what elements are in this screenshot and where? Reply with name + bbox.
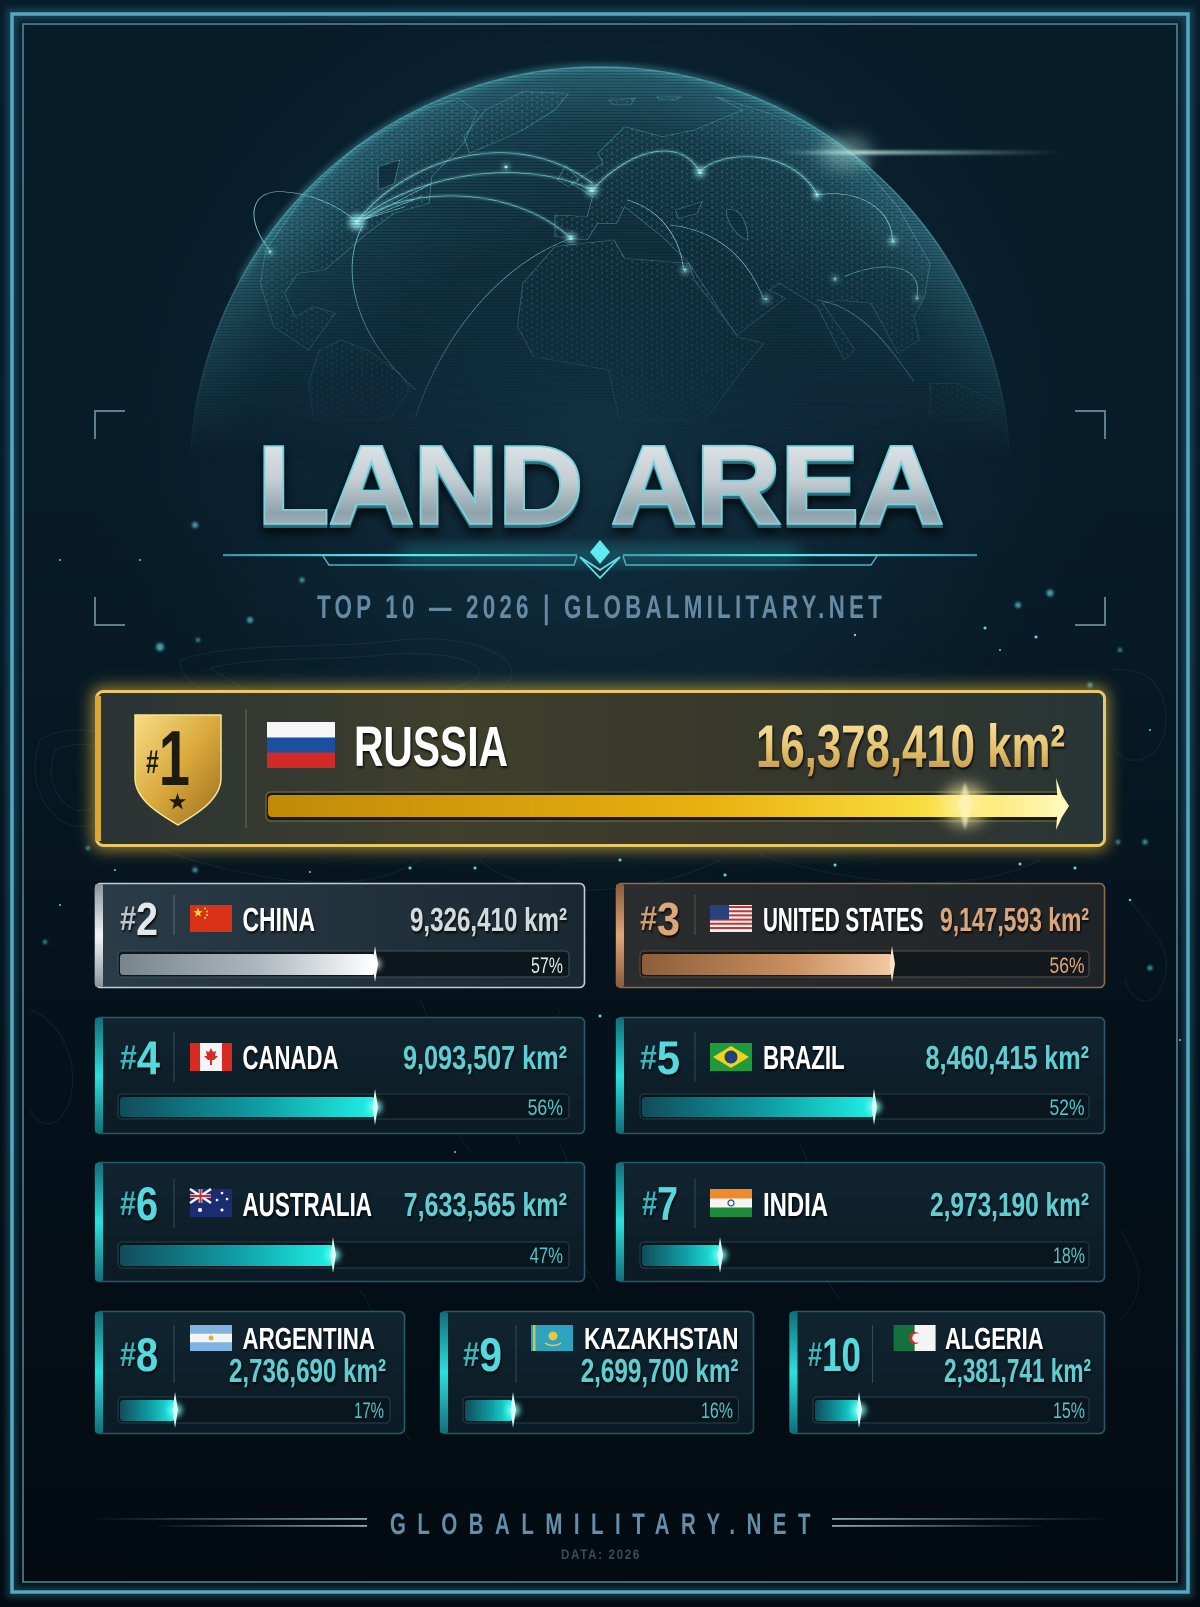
panel: rank 7 India: 2,973,190 km² <box>930 1186 1089 1223</box>
panel: rank 4 Canada: 4 <box>137 1031 160 1084</box>
flag: Algeria <box>894 1325 936 1351</box>
flag: India <box>710 1189 752 1217</box>
panel: rank 10 Algeria: # <box>808 1336 822 1374</box>
continents <box>260 92 1000 420</box>
title divider with diamond <box>223 540 977 578</box>
panel: rank 9 Kazakhstan <box>440 1312 754 1434</box>
panel: rank 8 Argentina: 17% <box>354 1398 384 1423</box>
panel: rank 6 Australia <box>95 1162 584 1282</box>
globe with network arcs <box>192 60 1008 440</box>
panel: rank 2 China <box>95 884 584 988</box>
icon: gold shield <box>135 714 221 825</box>
panel: rank 2 China: 9,326,410 km² <box>410 901 567 938</box>
panel: rank 5 Brazil: # <box>640 1039 657 1077</box>
panel: rank 4 Canada: CANADA <box>242 1039 338 1076</box>
panel: rank 1 Russia <box>92 687 1108 850</box>
panel: rank 2 China: 2 <box>136 893 158 945</box>
panel: rank 8 Argentina: 8 <box>136 1328 158 1381</box>
panel: rank 10 Algeria <box>790 1312 1104 1434</box>
panel: rank 8 Argentina <box>95 1312 404 1434</box>
panel: rank 9 Kazakhstan: KAZAKHSTAN <box>584 1321 738 1356</box>
panel: rank 7 India: 18% <box>1053 1243 1085 1268</box>
flag: Canada <box>190 1043 232 1071</box>
panel: rank 3 United States: 56% <box>1050 953 1084 978</box>
bar <box>266 778 1069 830</box>
flag: Brazil <box>710 1043 752 1071</box>
icon: gold shield: # <box>146 744 159 780</box>
particles <box>43 522 1181 1153</box>
value: 16,378,410 km² <box>756 713 1065 780</box>
panel: rank 4 Canada: 56% <box>528 1095 563 1120</box>
panel: rank 7 India: # <box>642 1185 657 1223</box>
footer brand: GLOBALMILITARY.NET <box>390 1508 822 1541</box>
panel: rank 10 Algeria: 2,381,741 km² <box>944 1352 1091 1389</box>
panel: rank 4 Canada: # <box>120 1039 137 1077</box>
panel: rank 6 Australia: 6 <box>136 1177 158 1230</box>
panel: rank 9 Kazakhstan: # <box>463 1336 479 1374</box>
panel: rank 2 China: # <box>120 900 136 938</box>
panel: rank 5 Brazil: BRAZIL <box>763 1039 845 1076</box>
panel: rank 8 Argentina: 2,736,690 km² <box>229 1352 386 1389</box>
panel: rank 3 United States: UNITED STATES <box>763 901 924 938</box>
panel: rank 3 United States: # <box>640 900 657 938</box>
flag: Australia <box>190 1189 232 1217</box>
panel: rank 10 Algeria: ALGERIA <box>945 1321 1044 1356</box>
corner brackets <box>95 411 1105 625</box>
title: LAND AREA <box>258 424 944 547</box>
panel: rank 4 Canada: 9,093,507 km² <box>403 1039 567 1076</box>
flag: United States <box>710 905 752 932</box>
footer data year: DATA: 2026 <box>561 1546 641 1562</box>
flag: China <box>190 905 232 932</box>
panel: rank 6 Australia: # <box>120 1185 136 1223</box>
panel: rank 8 Argentina: ARGENTINA <box>242 1321 375 1356</box>
panel: rank 7 India: 7 <box>657 1177 678 1230</box>
panel: rank 6 Australia: 47% <box>530 1243 563 1268</box>
panel: rank 10 Algeria: 15% <box>1053 1398 1085 1423</box>
globe sphere <box>192 66 1008 440</box>
icon: gold shield: 1 <box>159 714 190 802</box>
panel: rank 10 Algeria: 10 <box>822 1328 861 1381</box>
panel: rank 9 Kazakhstan: 2,699,700 km² <box>581 1352 738 1389</box>
panel: rank 3 United States: 3 <box>657 893 680 945</box>
footer divider lines <box>93 1518 1107 1527</box>
lens flare <box>780 136 1060 168</box>
subtitle: TOP 10 — 2026 | GLOBALMILITARY.NET <box>317 589 886 625</box>
panel: rank 3 United States: 9,147,593 km² <box>940 901 1089 938</box>
glowing nodes <box>267 164 920 303</box>
panel: rank 7 India: INDIA <box>763 1186 828 1223</box>
globe scanlines <box>198 69 1002 415</box>
faint topographic world map background <box>30 639 1167 1440</box>
panel: rank 5 Brazil <box>616 1018 1104 1134</box>
panel: rank 8 Argentina: # <box>120 1336 136 1374</box>
panel: rank 5 Brazil: 5 <box>657 1031 680 1084</box>
panel: rank 6 Australia: AUSTRALIA <box>242 1186 372 1223</box>
panel: rank 5 Brazil: 8,460,415 km² <box>926 1039 1089 1076</box>
panel: rank 6 Australia: 7,633,565 km² <box>404 1186 567 1223</box>
panel: rank 3 United States <box>616 884 1104 988</box>
panel: rank 4 Canada <box>95 1018 584 1134</box>
panel: rank 9 Kazakhstan: 9 <box>479 1328 502 1381</box>
panel: rank 9 Kazakhstan: 16% <box>701 1398 733 1423</box>
flag: Argentina <box>190 1325 232 1351</box>
flag: Kazakhstan <box>531 1325 573 1351</box>
country name: RUSSIA <box>354 715 508 779</box>
globe rim glow <box>240 67 870 281</box>
panel: rank 5 Brazil: 52% <box>1050 1095 1084 1120</box>
panel: rank 2 China: 57% <box>531 953 563 978</box>
flag: Russia <box>267 722 335 768</box>
panel: rank 7 India <box>616 1162 1104 1282</box>
flight arcs <box>254 151 918 417</box>
panel: rank 2 China: CHINA <box>242 901 315 938</box>
